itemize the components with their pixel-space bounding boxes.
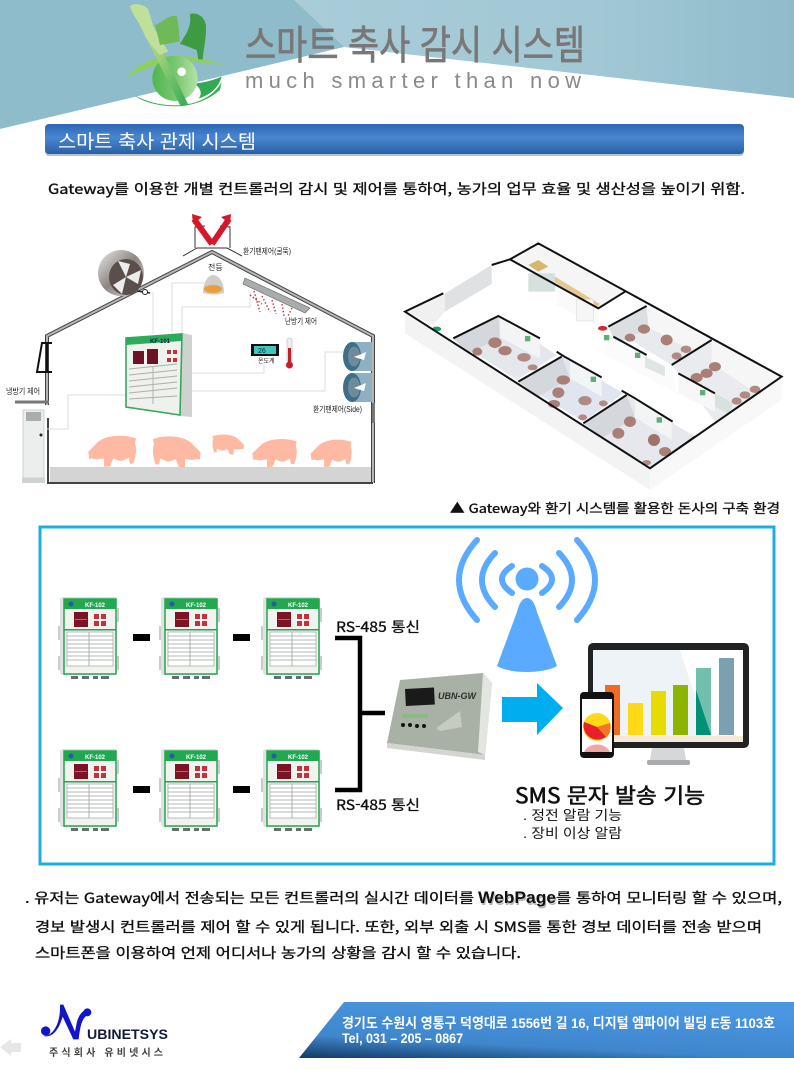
list: SMS functions: . 장비 이상 알람 (523, 826, 622, 841)
body text paragraph (25, 888, 782, 963)
heading: SMS 문자 발송 기능: SMS 문자 발송 기능 (515, 780, 705, 810)
footer address band: Tel, 031 – 205 – 0867 (342, 1030, 463, 1046)
icon: roof fan (98, 250, 150, 296)
header background (0, 0, 794, 130)
icon: roof vent with red arrows (183, 214, 242, 256)
icon: side fans (343, 342, 372, 402)
RS-485 bracket (335, 638, 385, 790)
pigs (88, 435, 352, 467)
controller row 1 (58, 597, 322, 679)
room B (518, 357, 623, 422)
icon: monitor with bar chart (588, 643, 749, 765)
section heading bar (45, 124, 744, 156)
label: 냉방기 제어: 냉방기 제어 (6, 386, 40, 396)
controller row 1: KF-102 (85, 603, 106, 609)
icon: window actuator (37, 343, 52, 373)
outer walls and floor (405, 243, 782, 490)
icon: thermometer display: 26 (258, 348, 266, 355)
body text paragraph: WebPage (478, 888, 556, 907)
label: 난방기 제어: 난방기 제어 (285, 316, 317, 326)
room D (608, 306, 712, 365)
icon: floor air conditioner (22, 410, 45, 483)
icon: heat lamp (203, 275, 224, 294)
room C (583, 395, 695, 468)
panel: gateway system diagram (40, 527, 774, 864)
room E (672, 341, 782, 422)
logo mark: blue N (41, 1005, 91, 1039)
icon: UBN-GW gateway device (387, 673, 492, 760)
icon: main controller KF-101: KF-101 (150, 339, 171, 345)
title: 스마트 축사 감시 시스템: 스마트 축사 감시 시스템 (245, 24, 585, 68)
label: RS-485 bottom: RS-485 통신 (336, 795, 420, 815)
company name in Korean: 주식회사 유비넷시스 (49, 1046, 163, 1059)
label: 환기팬제어(Side): 환기팬제어(Side) (313, 404, 362, 414)
room A (453, 316, 557, 380)
icon: main controller KF-101 (126, 333, 192, 417)
list: SMS functions (523, 808, 622, 841)
body text paragraph: . 유저는 Gateway에서 전송되는 모든 컨트롤러의 실시간 데이터를 (25, 888, 474, 908)
3D floor plan of pig house (405, 243, 782, 490)
logo: green eye and rooster emblem (127, 4, 223, 106)
icon: UBN-GW gateway device: UBN-GW (438, 691, 477, 701)
controller row 2 (58, 749, 322, 831)
body text paragraph: 를 통하여 모니터링 할 수 있으며, (556, 888, 782, 908)
arrow (502, 683, 563, 735)
black wall tops (405, 243, 782, 468)
controller row 2: KF-102 (288, 755, 309, 761)
company logo: UBINETSYS (41, 1005, 168, 1059)
label: 온도계: 온도계 (258, 357, 275, 365)
connection lines (46, 283, 344, 429)
footer address band (299, 1002, 794, 1058)
controller row 1: KF-102 (186, 603, 207, 609)
label: 전등: 전등 (208, 262, 223, 272)
faded back arrow (0, 1039, 21, 1056)
caption: ▲ Gateway와 환기 시스템를 활용한 돈사의 구축 환경 (450, 498, 780, 517)
office room (510, 243, 625, 325)
controller row 2: KF-102 (85, 755, 106, 761)
subtitle text: Gateway를 이용한 개별 컨트롤러의 감시 및 제어를 통하여, 농가의 업무 효율 및 생산성을 높이기 위함. (48, 179, 745, 199)
controller row 2: KF-102 (186, 755, 207, 761)
label: 환기팬제어(굴뚝): 환기팬제어(굴뚝) (243, 246, 291, 256)
body text paragraph: 경보 발생시 컨트롤러를 제어 할 수 있게 됩니다. 또한, 외부 외출 시 SMS를 통한 경보 데이터를 전송 받으며 (35, 917, 762, 937)
corridor partition walls (603, 334, 733, 413)
label: RS-485 top: RS-485 통신 (336, 617, 420, 637)
barn structure (15, 252, 375, 483)
barn cross-section diagram (6, 214, 375, 483)
section heading bar: 스마트 축사 관제 시스템 (58, 131, 256, 153)
controller row 1: KF-102 (288, 603, 309, 609)
icon: smartphone with pie chart (580, 692, 614, 758)
icon: wireless antenna (459, 540, 595, 672)
icon: thermometer display (251, 338, 293, 368)
tagline: much smarter than now (245, 68, 581, 93)
body text paragraph: 스마트폰을 이용하여 언제 어디서나 농가의 상황을 감시 할 수 있습니다. (35, 943, 521, 963)
list: SMS functions: . 정전 알람 기능 (523, 808, 622, 823)
sensors (432, 326, 705, 423)
wordmark: UBINETSYS (87, 1026, 168, 1042)
body text paragraph: WebPage (479, 890, 557, 909)
icon: radiant heater (243, 278, 310, 316)
link dashes (133, 634, 250, 793)
